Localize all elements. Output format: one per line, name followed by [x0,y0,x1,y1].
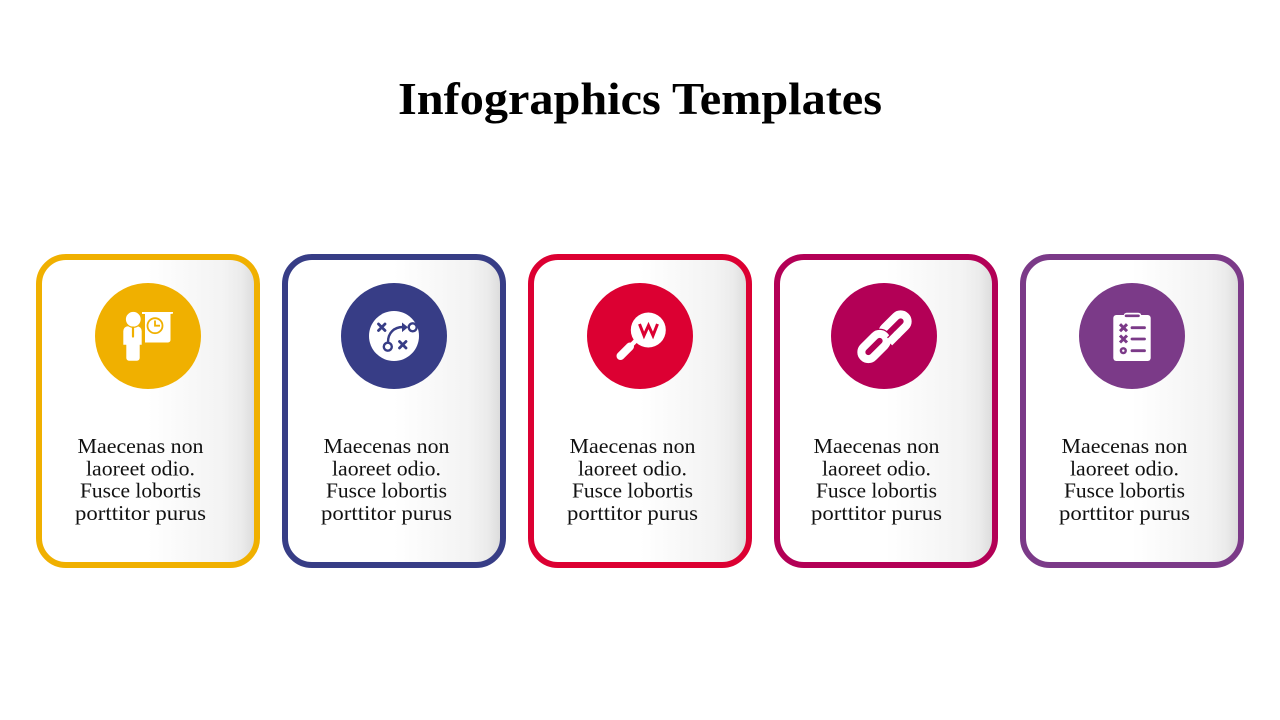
card text: Fusce lobortis [816,478,937,502]
card text: porttitor purus [75,501,206,525]
card text [75,434,206,525]
card text: Fusce lobortis [80,478,201,502]
panel: card 4 magenta [777,257,995,565]
card text: Maecenas non [324,434,450,458]
card text: laoreet odio. [1070,456,1179,480]
card frame [1023,257,1241,565]
panel: card 3 red [531,257,749,565]
card text: Fusce lobortis [326,478,447,502]
icon: magnifier with W [587,283,693,389]
card text: porttitor purus [1059,501,1190,525]
title: Infographics Templates [398,73,882,124]
icon: presenter with chart board [95,283,201,389]
card frame [531,257,749,565]
icon: clipboard checklist [1079,283,1185,389]
icon: chain link [831,283,937,389]
card text: Fusce lobortis [1064,478,1185,502]
card frame [39,257,257,565]
panel: card 2 navy [285,257,503,565]
card text [567,434,698,525]
card text: laoreet odio. [332,456,441,480]
card text: Maecenas non [78,434,204,458]
card text: Maecenas non [570,434,696,458]
card text: laoreet odio. [578,456,687,480]
card text: porttitor purus [321,501,452,525]
card text: laoreet odio. [86,456,195,480]
panel: card 1 yellow [39,257,257,565]
card text [811,434,942,525]
icon: strategy play diagram [341,283,447,389]
card text: Maecenas non [814,434,940,458]
card text: Maecenas non [1062,434,1188,458]
card frame [285,257,503,565]
card frame [777,257,995,565]
card text: Fusce lobortis [572,478,693,502]
card text: porttitor purus [811,501,942,525]
card text [321,434,452,525]
card text: porttitor purus [567,501,698,525]
card text [1059,434,1190,525]
card text: laoreet odio. [822,456,931,480]
panel: card 5 purple [1023,257,1241,565]
